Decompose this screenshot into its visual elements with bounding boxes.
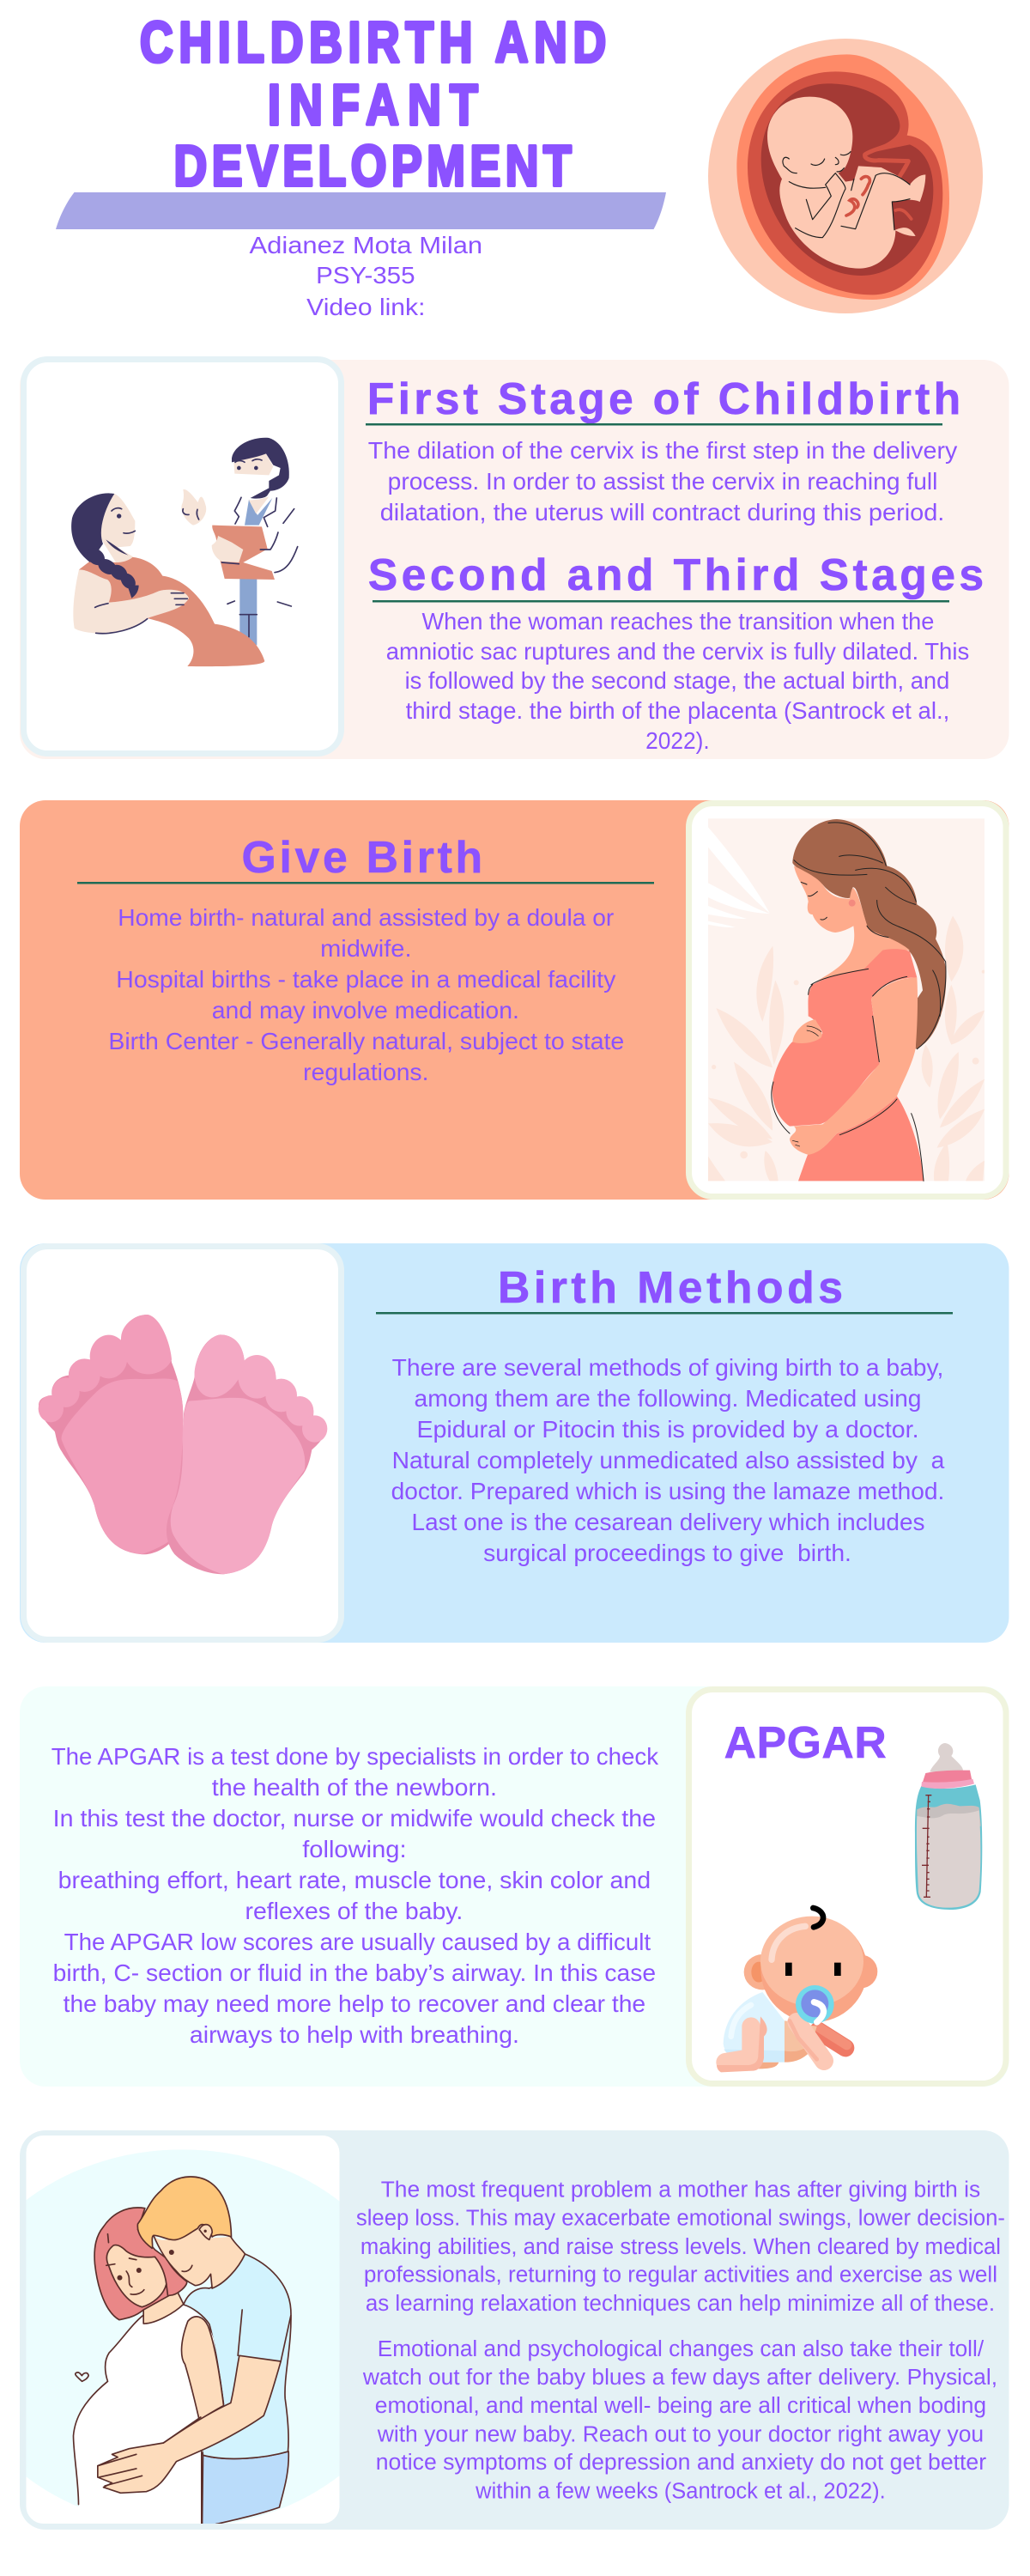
text block: birth methods: Epidural or Pitocin this is provided by a doctor. — [417, 1416, 919, 1443]
text block: APGAR — [52, 1743, 658, 2048]
text block: second and third stages: is followed by the second stage, the actual birth, and — [405, 667, 949, 694]
text block: first stage: dilatation, the uterus will contract during this period. — [380, 499, 944, 526]
panel background — [20, 1686, 1009, 2087]
illustration: patient and doctor — [71, 438, 298, 666]
text block: second and third stages — [386, 608, 969, 754]
panel: give birth — [20, 800, 1009, 1200]
title banner — [56, 192, 666, 229]
text block: sleep loss: professionals, returning to regular activities and exercise as well — [364, 2263, 997, 2287]
panel: after birth — [0, 2130, 1009, 2530]
text block: emotional changes: watch out for the baby blues a few days after delivery. Physical, — [362, 2366, 997, 2390]
header — [56, 9, 983, 320]
text block: birth methods: among them are the following. Medicated using — [415, 1385, 921, 1412]
text block: birth methods: There are several methods of giving birth to a baby, — [392, 1354, 943, 1381]
author block: PSY-355 — [316, 262, 415, 289]
icon: baby bottle — [915, 1743, 982, 1910]
text block: birth settings: Hospital births - take place in a medical facility — [116, 966, 615, 993]
image card — [688, 804, 1006, 1197]
illustration: pregnant woman — [708, 818, 985, 1181]
text block: APGAR: the baby may need more help to recover and clear the — [64, 1990, 645, 2017]
text block: birth methods: doctor. Prepared which is using the lamaze method. — [391, 1478, 944, 1504]
text block: APGAR: birth, C- section or fluid in the baby’s airway. In this case — [53, 1959, 656, 1986]
text block: birth settings: Birth Center - Generally natural, subject to state — [108, 1028, 624, 1054]
text block: birth methods: Natural completely unmedicated also assisted by a — [392, 1447, 945, 1473]
heading: APGAR: APGAR — [724, 1717, 887, 1767]
text block: second and third stages: 2022). — [645, 727, 710, 754]
panel background — [20, 2130, 1009, 2530]
text block: emotional changes: Emotional and psychological changes can also take their toll/ — [378, 2337, 985, 2361]
text block: APGAR: airways to help with breathing. — [190, 2021, 519, 2048]
text block: APGAR: the health of the newborn. — [212, 1774, 497, 1801]
author block — [250, 232, 482, 320]
text block: birth methods: surgical proceedings to give birth. — [483, 1540, 851, 1566]
text block: APGAR: In this test the doctor, nurse or midwife would check the — [53, 1805, 656, 1832]
image card — [688, 1690, 1006, 2083]
text block: first stage — [368, 437, 957, 526]
title: CHILDBIRTH AND — [140, 9, 606, 74]
text block: first stage: The dilation of the cervix is the first step in the delivery — [368, 437, 957, 464]
icon: fetus in womb — [708, 39, 983, 313]
text block: birth settings: midwife. — [320, 935, 412, 962]
heading rule — [376, 1312, 953, 1314]
heading: first stage: First Stage of Childbirth — [367, 374, 960, 423]
text block: birth settings — [108, 904, 624, 1085]
panel: stages of childbirth — [20, 359, 1009, 759]
illustration: couple — [26, 2136, 340, 2524]
panel: birth methods — [20, 1243, 1009, 1643]
heading: birth methods: Birth Methods — [498, 1262, 843, 1312]
text block: first stage: process. In order to assist the cervix in reaching full — [388, 468, 937, 495]
text block: birth settings: regulations. — [303, 1059, 428, 1085]
text block: APGAR: following: — [302, 1836, 407, 1862]
text block: APGAR: The APGAR is a test done by specialists in order to check — [52, 1743, 658, 1770]
title: INFANT — [268, 72, 478, 137]
panel background — [20, 360, 1009, 759]
text block: emotional changes: within a few weeks (Santrock et al., 2022). — [475, 2479, 886, 2504]
image card — [24, 1247, 342, 1640]
author block: Adianez Mota Milan — [250, 232, 482, 258]
author block: Video link: — [306, 294, 425, 320]
text block: second and third stages: amniotic sac ruptures and the cervix is fully dilated. This — [386, 638, 969, 665]
title: DEVELOPMENT — [173, 133, 572, 197]
text block: emotional changes: with your new baby. Reach out to your doctor right away you — [377, 2422, 984, 2447]
text block: second and third stages: third stage. the birth of the placenta (Santrock et al., — [406, 697, 949, 724]
illustration: baby feet — [39, 1315, 327, 1574]
text block: sleep loss: The most frequent problem a mother has after giving birth is — [381, 2178, 980, 2202]
text block: sleep loss: making abilities, and raise stress levels. When cleared by medical — [360, 2235, 1001, 2259]
text block: birth methods: Last one is the cesarean delivery which includes — [412, 1509, 924, 1535]
text block: birth settings: Home birth- natural and assisted by a doula or — [118, 904, 614, 931]
text block: second and third stages: When the woman reaches the transition when the — [421, 608, 934, 635]
heading rule — [77, 882, 654, 884]
heading: give birth: Give Birth — [242, 832, 482, 882]
text block: sleep loss: sleep loss. This may exacerbate emotional swings, lower decision- — [356, 2206, 1005, 2231]
text block: APGAR: breathing effort, heart rate, muscle tone, skin color and — [58, 1867, 651, 1893]
title — [140, 9, 606, 197]
panel: APGAR — [20, 1686, 1009, 2087]
text block: birth methods — [391, 1354, 945, 1566]
text block: APGAR: The APGAR low scores are usually caused by a difficult — [64, 1929, 651, 1955]
panel background — [20, 1243, 1009, 1643]
image card — [24, 359, 342, 754]
heading rule — [373, 600, 949, 603]
text block: emotional changes: emotional, and mental well- being are all critical when boding — [375, 2394, 986, 2418]
icon: crawling baby — [717, 1908, 877, 2072]
text block: sleep loss: as learning relaxation techniques can help minimize all of these. — [366, 2292, 995, 2316]
text block: emotional changes — [362, 2337, 997, 2504]
text block: birth settings: and may involve medication. — [212, 997, 519, 1024]
heading: second and third stages: Second and Third Stages — [368, 550, 984, 599]
text block: emotional changes: notice symptoms of depression and anxiety do not get better — [376, 2451, 986, 2475]
text block: sleep loss — [356, 2178, 1005, 2316]
panel background — [20, 800, 1009, 1200]
text block: APGAR: reflexes of the baby. — [245, 1898, 463, 1924]
heading rule — [366, 423, 942, 426]
